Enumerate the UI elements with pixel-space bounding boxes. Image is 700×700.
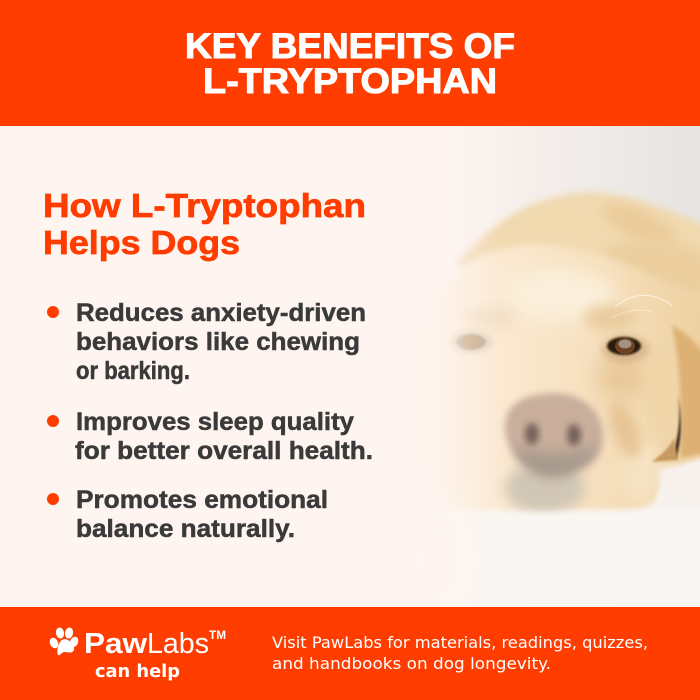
logo: PawLabs: Paw bbox=[84, 628, 147, 660]
heading: Helps Dogs bbox=[43, 224, 240, 261]
dog nose bbox=[505, 393, 603, 478]
title bbox=[185, 27, 515, 101]
dog photo bbox=[444, 126, 700, 516]
icon: paw bbox=[48, 627, 80, 655]
title: L-TRYPTOPHAN bbox=[203, 62, 497, 101]
logo: PawLabs: Labs bbox=[147, 628, 209, 660]
bullet 2: Improves sleep quality bbox=[76, 408, 354, 436]
left eye bbox=[456, 334, 486, 350]
right eye bbox=[607, 337, 641, 355]
bullet 3: Promotes emotional bbox=[76, 486, 328, 514]
bullet 3: balance naturally. bbox=[76, 515, 295, 543]
bullet 1 bbox=[47, 299, 366, 385]
bullet 1: Reduces anxiety-driven bbox=[76, 299, 366, 327]
title: KEY BENEFITS OF bbox=[185, 27, 515, 66]
footer text: Visit PawLabs for materials, readings, quizzes, bbox=[272, 633, 648, 652]
bullet 2: for better overall health. bbox=[75, 437, 373, 465]
footer text: and handbooks on dog longevity. bbox=[272, 654, 551, 673]
footer band bbox=[0, 607, 700, 700]
footer text bbox=[272, 633, 648, 673]
bullet list bbox=[47, 299, 373, 543]
heading bbox=[43, 187, 366, 261]
bullet 1: behaviors like chewing bbox=[76, 328, 360, 356]
header band bbox=[0, 0, 700, 126]
tagline: can help: can help bbox=[95, 661, 180, 682]
bullet 1: or barking. bbox=[76, 357, 190, 385]
bullet 2 bbox=[47, 408, 373, 465]
logo: PawLabs bbox=[84, 628, 226, 660]
heading: How L-Tryptophan bbox=[43, 187, 366, 224]
bullet 3 bbox=[47, 486, 328, 543]
logo: PawLabs: TM bbox=[209, 628, 226, 642]
